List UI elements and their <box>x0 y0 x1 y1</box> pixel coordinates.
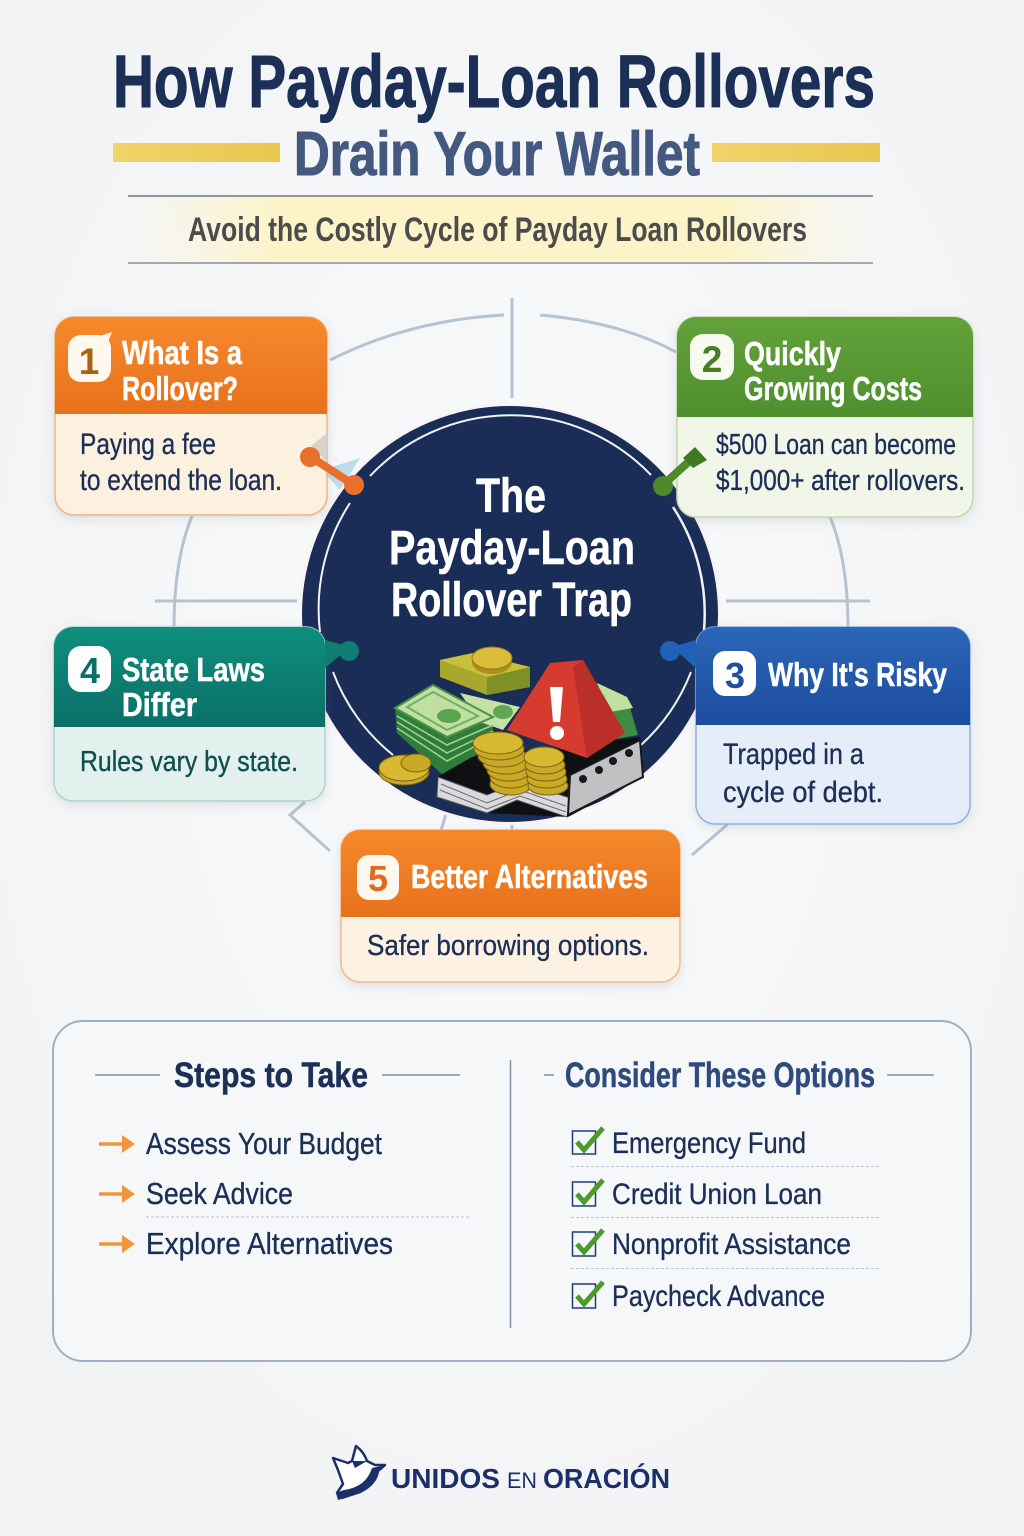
card 4: state laws differ: Rules vary by state. <box>80 746 298 778</box>
panel: actions and options <box>53 1021 971 1361</box>
subtitle banner <box>128 196 873 263</box>
title <box>113 40 880 189</box>
card 2: quickly growing costs: Quickly <box>744 335 842 372</box>
red warning <box>507 660 625 758</box>
consider these options <box>544 1056 934 1313</box>
number badge 3 <box>713 651 756 696</box>
option: paycheck advance: Paycheck Advance <box>612 1280 825 1313</box>
card 2: quickly growing costs: $1,000+ after rollovers. <box>716 465 965 497</box>
option: credit union loan: Credit Union Loan <box>612 1178 822 1211</box>
card 4: state laws differ: State Laws <box>122 651 265 688</box>
center heading: Payday-Loan <box>389 522 635 575</box>
card 1: what is a rollover <box>55 317 327 515</box>
card 4: state laws differ: Differ <box>122 686 197 723</box>
number badge 5 <box>357 855 399 900</box>
card 1: what is a rollover: to extend the loan. <box>80 464 282 497</box>
title: Drain Your Wallet <box>294 120 700 189</box>
card 4: state laws differ <box>54 627 325 801</box>
number badge 3: 3 <box>725 655 745 696</box>
card 5: better alternatives <box>341 830 680 982</box>
connector: card 2 <box>653 447 707 496</box>
wallet <box>437 737 643 817</box>
center heading <box>389 470 635 627</box>
number badge 2 <box>690 334 734 380</box>
option: nonprofit assistance: Nonprofit Assistance <box>612 1228 851 1261</box>
number badge 2: 2 <box>702 339 722 380</box>
option: emergency fund: Emergency Fund <box>612 1127 806 1160</box>
consider these options: Consider These Options <box>565 1056 875 1095</box>
card 3: why it's risky: cycle of debt. <box>723 776 883 809</box>
green cash stacks <box>395 683 638 777</box>
number badge 5: 5 <box>368 858 388 899</box>
card 5: better alternatives: Safer borrowing options. <box>367 930 649 962</box>
central circle <box>299 403 721 825</box>
logo: EN <box>507 1468 537 1493</box>
card 3: why it's risky: Trapped in a <box>723 738 864 771</box>
number badge 1 <box>68 332 112 382</box>
step: seek advice <box>99 1176 293 1211</box>
logo: ORACIÓN <box>543 1463 670 1494</box>
card 3: why it's risky <box>696 627 970 824</box>
steps to take: Steps to Take <box>174 1056 368 1095</box>
card 5: better alternatives: Better Alternatives <box>411 858 648 895</box>
icon: dove <box>333 1446 385 1500</box>
card 2: quickly growing costs: Growing Costs <box>744 370 922 407</box>
logo: UNIDOS <box>391 1463 500 1494</box>
card 2: quickly growing costs: $500 Loan can become <box>716 429 956 461</box>
number badge 1: 1 <box>79 341 99 382</box>
step: explore alternatives: Explore Alternatives <box>146 1226 393 1261</box>
top cash <box>440 647 530 695</box>
card 1: what is a rollover: Paying a fee <box>80 428 216 461</box>
logo <box>333 1446 670 1500</box>
center heading: Rollover Trap <box>391 574 632 627</box>
connector: card 3 <box>660 640 696 668</box>
step: seek advice: Seek Advice <box>146 1176 293 1211</box>
steps to take <box>95 1056 470 1261</box>
connector: card 4 <box>325 640 359 668</box>
center heading: The <box>476 470 546 523</box>
icon: money, coins and warning <box>379 647 643 817</box>
card 2: quickly growing costs <box>677 317 973 517</box>
card 3: why it's risky: Why It's Risky <box>768 656 948 693</box>
card 1: what is a rollover: Rollover? <box>122 370 238 407</box>
connector: card 1 <box>300 447 364 495</box>
coins <box>379 732 568 795</box>
subtitle banner: Avoid the Costly Cycle of Payday Loan Rollovers <box>188 211 807 249</box>
number badge 4 <box>68 646 111 692</box>
card 1: what is a rollover: What Is a <box>122 334 243 371</box>
number badge 4: 4 <box>80 650 100 691</box>
step: assess your budget: Assess Your Budget <box>146 1126 382 1161</box>
